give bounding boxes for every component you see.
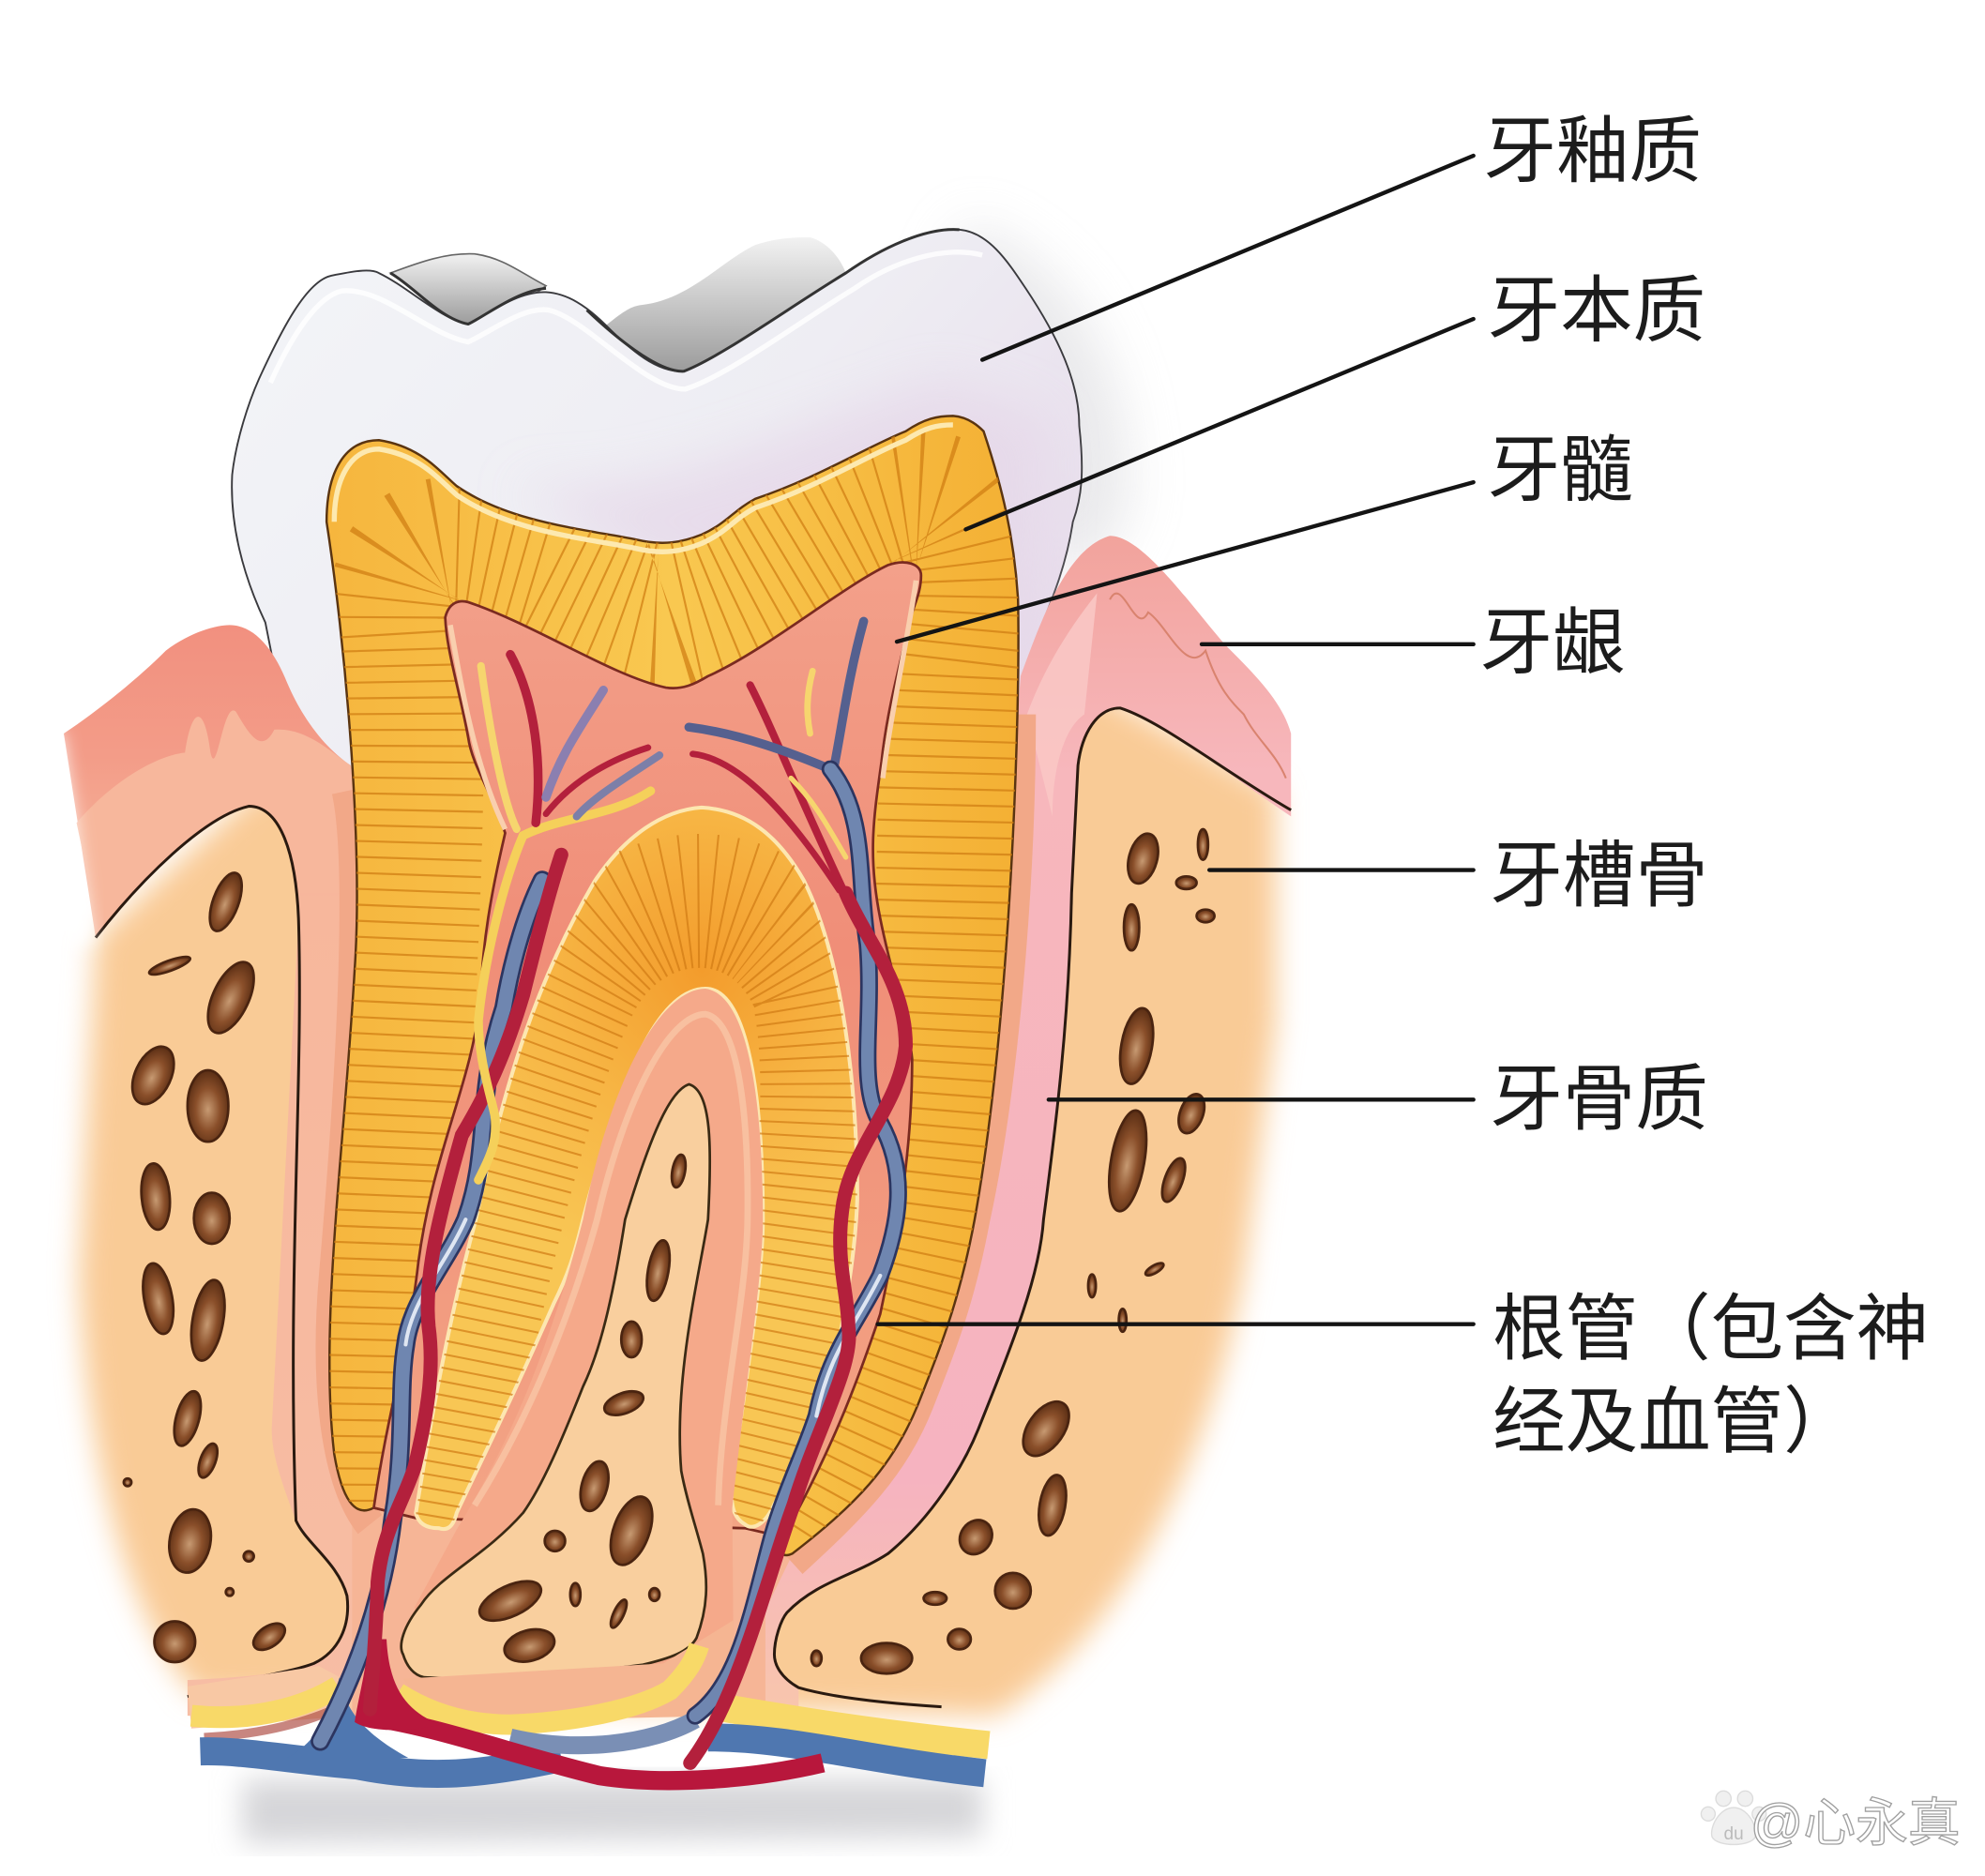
occlusal back surface — [390, 237, 846, 371]
bone outline left — [96, 807, 348, 1697]
left edge fade — [49, 734, 79, 944]
inner cementum — [415, 989, 763, 1697]
leader lines — [878, 156, 1474, 1324]
pulp chamber — [373, 563, 921, 1537]
occlusal dark ridge — [390, 230, 960, 371]
bone cavities: right — [811, 829, 1215, 1673]
interradicular bone — [402, 1084, 710, 1678]
gingival lighter zone — [77, 710, 364, 931]
bone outline right — [774, 708, 1291, 1707]
enamel white halo — [270, 252, 982, 389]
label: alveolar bone: 牙槽骨 — [1490, 836, 1708, 916]
inner dentin arch — [416, 808, 857, 1531]
dentin pale rim — [334, 425, 953, 552]
bottom tissue bands — [188, 1620, 989, 1780]
dentin — [326, 416, 1019, 1555]
label: root canal: 经及血管） — [1493, 1382, 1856, 1462]
label: enamel: 牙釉质 — [1484, 112, 1702, 192]
label: cementum: 牙骨质 — [1490, 1059, 1708, 1140]
label: root canal: 根管（包含神 — [1493, 1289, 1929, 1369]
bone base glow — [79, 688, 1276, 1716]
watermark text: @心永真 — [1750, 1793, 1961, 1852]
gum and periodontal ligament: right — [689, 536, 1309, 1716]
watermark — [1701, 1791, 1961, 1852]
ground shadow — [242, 1779, 982, 1843]
label: pulp: 牙髓 — [1488, 431, 1633, 511]
gum and periodontal tissue: left — [49, 625, 383, 1716]
blood vessels and nerves: right canal — [689, 621, 906, 1763]
label: dentin: 牙本质 — [1488, 271, 1705, 352]
root base tissue — [352, 1467, 816, 1716]
crown soft shadow — [893, 223, 1129, 587]
artery flare — [355, 1640, 440, 1730]
cementum pale band — [475, 1014, 748, 1505]
pulp pale rim — [450, 581, 916, 829]
label: gum: 牙龈 — [1479, 602, 1625, 683]
vein flare — [287, 1677, 408, 1758]
bone cavities: inner — [474, 1154, 688, 1667]
enamel — [232, 230, 1082, 893]
icon: paw logo — [1701, 1791, 1766, 1844]
root cementum edges — [331, 715, 1021, 1563]
dentin striations — [383, 507, 965, 1544]
icon: paw logo: du — [1724, 1824, 1744, 1844]
enamel lilac tint — [510, 383, 1046, 663]
blood vessels and nerves: left canal — [287, 655, 659, 1758]
enamel body — [232, 230, 1082, 893]
right edge fade — [1299, 727, 1318, 829]
gingival fold right — [1110, 594, 1286, 779]
arch striations — [433, 900, 827, 1531]
bone cavities: left — [124, 869, 290, 1662]
